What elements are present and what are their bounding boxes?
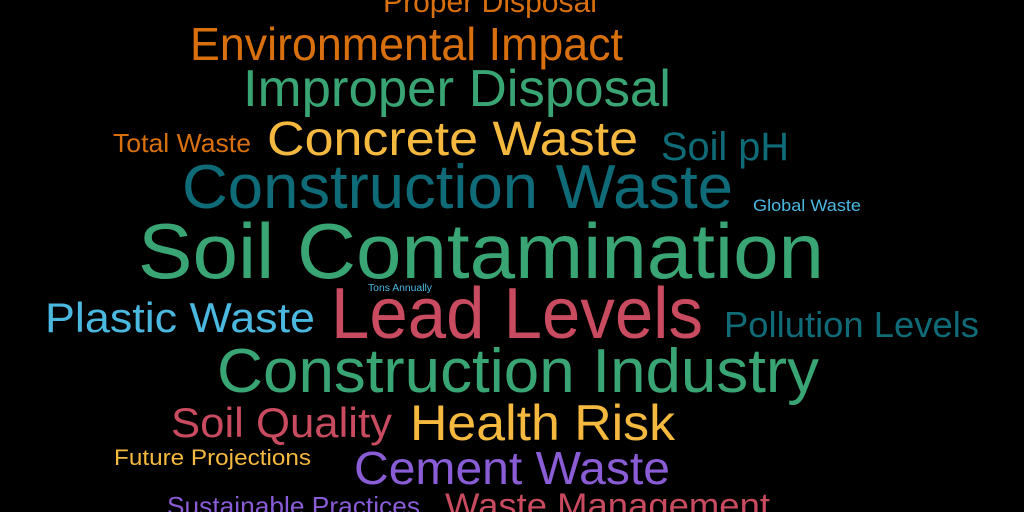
word: Pollution Levels: Pollution Levels [724,304,979,345]
word: Future Projections: Future Projections [114,445,311,470]
word: Soil pH: Soil pH [661,125,789,169]
word: Plastic Waste: Plastic Waste [45,294,315,341]
word: Soil Quality: Soil Quality [171,399,392,446]
word: Lead Levels: Lead Levels [331,274,703,354]
word: Concrete Waste: Concrete Waste [267,113,638,166]
word: Health Risk: Health Risk [410,395,676,451]
word: Soil Contamination: Soil Contamination [138,207,824,295]
word: Total Waste: Total Waste [113,128,251,158]
word: Improper Disposal: Improper Disposal [243,60,671,118]
word: Environmental Impact: Environmental Impact [190,18,623,70]
word: Construction Industry: Construction Industry [217,337,819,406]
word: Tons Annually: Tons Annually [368,283,432,294]
word: Cement Waste: Cement Waste [354,442,670,494]
word: Global Waste: Global Waste [753,196,861,215]
word: Construction Waste: Construction Waste [182,153,733,222]
